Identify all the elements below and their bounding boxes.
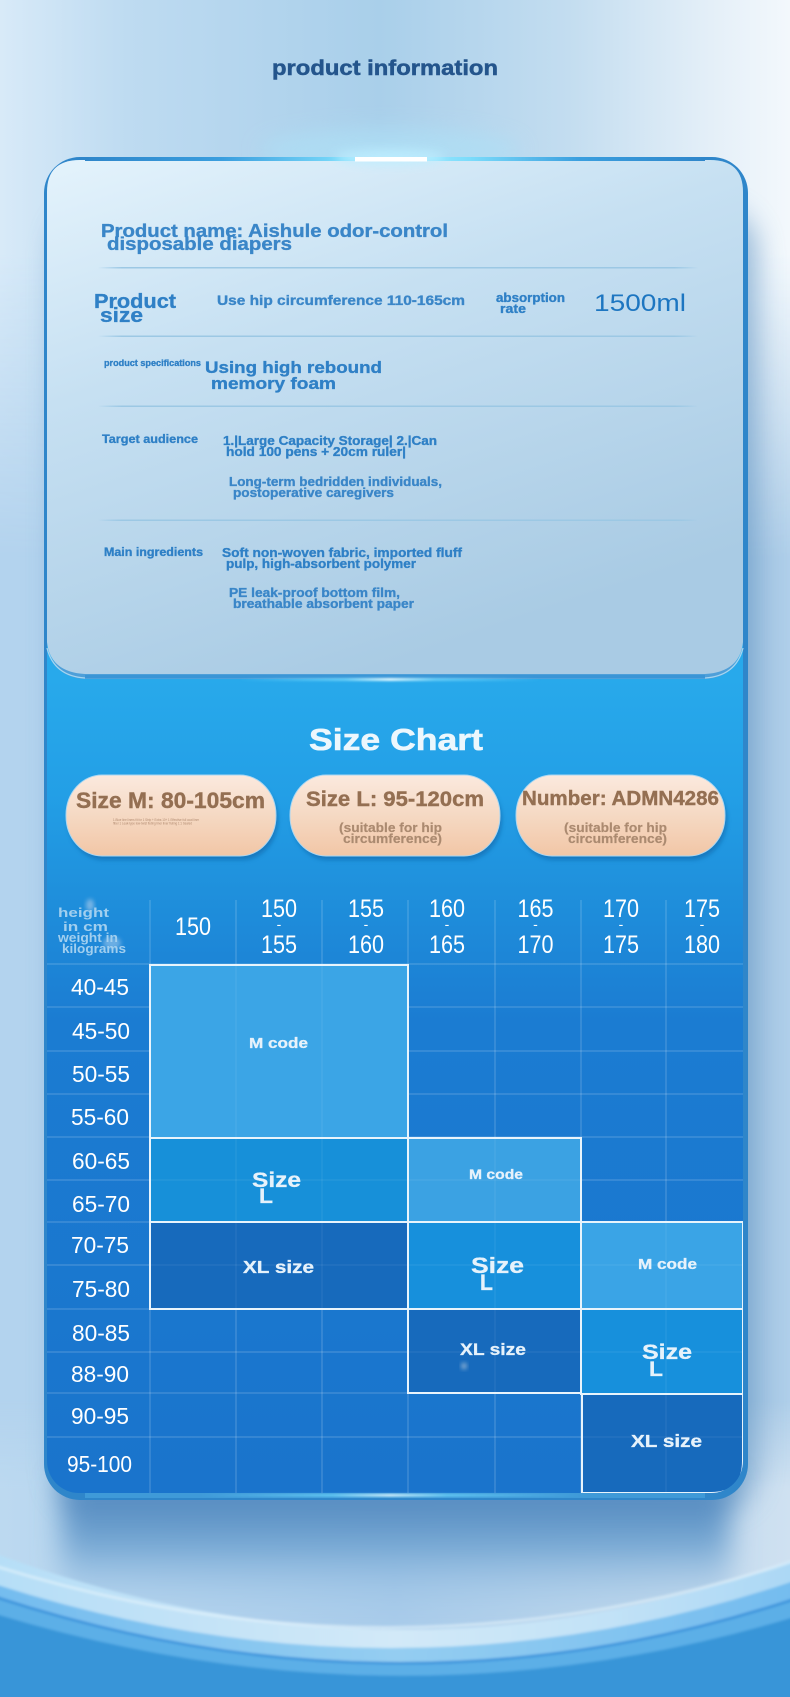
- weight row labels: 80-85: [72, 1320, 130, 1346]
- bottom curved wave: [0, 1544, 790, 1697]
- size labels in table: Size: [642, 1341, 692, 1364]
- table header label: in cm: [63, 919, 108, 934]
- weight row labels: 88-90: [71, 1361, 129, 1387]
- height header values: -: [277, 916, 282, 932]
- pill: size M: fiber 1 Leak-type low-twist fluting liner liner fluting 1:1 Sealed: [113, 822, 192, 826]
- target audience row: postoperative caregivers: [233, 485, 394, 500]
- product specifications row: product specifications: [104, 358, 201, 369]
- weight row labels: 70-75: [71, 1232, 129, 1258]
- product card shell: [44, 157, 748, 1500]
- product specifications row: Using high rebound: [205, 358, 382, 377]
- weight row labels: 50-55: [72, 1061, 130, 1087]
- size labels in table: M code: [469, 1167, 524, 1182]
- pill: size L: [290, 775, 502, 860]
- pill: size L: (suitable for hip: [339, 820, 442, 835]
- pill: number: circumference): [568, 831, 667, 846]
- table header label: weight in: [57, 930, 118, 945]
- height header values: [175, 895, 720, 959]
- weight row labels: 45-50: [72, 1018, 130, 1044]
- height header values: -: [619, 916, 624, 932]
- target audience row: [102, 432, 442, 500]
- size chart heading: Size Chart: [309, 722, 483, 757]
- pill: number: (suitable for hip: [564, 820, 667, 835]
- frosted information panel: [47, 160, 743, 679]
- size labels in table: L: [480, 1270, 493, 1295]
- target audience row: Target audience: [102, 432, 198, 446]
- pill: size M: 1.Blue line liners fit for 1 Strip + Extra 10+ 1 Effective full coat liner: [113, 818, 200, 822]
- height header values: -: [700, 916, 705, 932]
- height header values: -: [533, 916, 538, 932]
- size labels in table: XL size: [631, 1431, 702, 1451]
- height header values: 160: [348, 931, 384, 959]
- table header label: kilograms: [62, 941, 126, 956]
- size labels in table: M code: [638, 1257, 697, 1273]
- block outlines: [150, 965, 743, 1493]
- pill: size L: circumference): [343, 831, 442, 846]
- weight row labels: 60-65: [72, 1148, 130, 1174]
- height header values: 150: [175, 913, 211, 941]
- product name: [101, 220, 448, 254]
- pill: number: [516, 775, 727, 860]
- size labels in table: M code: [249, 1036, 308, 1052]
- table header label: height: [58, 905, 110, 920]
- height header values: 175: [603, 931, 639, 959]
- product size row: Use hip circumference 110-165cm: [217, 292, 465, 308]
- bottom edge glow: [85, 1493, 705, 1498]
- product size row: 1500ml: [594, 290, 686, 317]
- product specifications row: memory foam: [211, 374, 336, 393]
- height header values: 165: [518, 895, 554, 923]
- product size row: rate: [500, 302, 526, 316]
- height header values: 160: [429, 895, 465, 923]
- weight row labels: [67, 974, 132, 1477]
- main ingredients row: pulp, high-absorbent polymer: [226, 556, 416, 571]
- pill: number: Number: ADMN4286: [522, 788, 719, 810]
- weight row labels: 75-80: [72, 1276, 130, 1302]
- size labels in table: L: [259, 1185, 273, 1208]
- height header values: 180: [684, 931, 720, 959]
- size table: [47, 900, 743, 1493]
- height header values: -: [445, 916, 450, 932]
- product size row: size: [100, 304, 143, 327]
- weight row labels: 90-95: [71, 1403, 129, 1429]
- main ingredients row: breathable absorbent paper: [233, 596, 414, 611]
- main ingredients row: Main ingredients: [104, 545, 203, 559]
- size labels in table: Size: [471, 1253, 524, 1278]
- table header label: [57, 899, 126, 956]
- pill: size L: Size L: 95-120cm: [306, 788, 484, 811]
- product size row: [94, 290, 686, 327]
- height header values: 155: [261, 931, 297, 959]
- height header values: 150: [261, 895, 297, 923]
- top and panel glows: [85, 149, 705, 681]
- divider rules: [98, 267, 698, 521]
- grid lines: [47, 900, 743, 1493]
- height header values: 170: [518, 931, 554, 959]
- weight row labels: 40-45: [71, 974, 129, 1000]
- target audience row: Long-term bedridden individuals,: [229, 474, 442, 489]
- product specifications row: [104, 358, 382, 393]
- size labels in table: [243, 1036, 702, 1451]
- card drop shadow: [56, 210, 756, 1615]
- height header values: -: [364, 916, 369, 932]
- size labels in table: L: [649, 1358, 663, 1381]
- product name: Product name: Aishule odor-control: [101, 220, 448, 241]
- size labels in table: XL size: [460, 1340, 526, 1359]
- weight row labels: 65-70: [72, 1191, 130, 1217]
- height header values: 175: [684, 895, 720, 923]
- weight row labels: 95-100: [67, 1451, 132, 1477]
- product size row: absorption: [496, 291, 565, 305]
- target audience row: 1.|Large Capacity Storage| 2.|Can: [223, 433, 437, 448]
- main ingredients row: [104, 545, 463, 611]
- pill: size M: Size M: 80-105cm: [76, 788, 265, 813]
- height header values: 170: [603, 895, 639, 923]
- size labels in table: Size: [252, 1169, 301, 1192]
- height header values: 155: [348, 895, 384, 923]
- faint grid over blocks: [150, 965, 743, 1493]
- height header values: 165: [429, 931, 465, 959]
- main ingredients row: Soft non-woven fabric, imported fluff: [222, 545, 463, 560]
- target audience row: hold 100 pens + 20cm ruler|: [226, 444, 406, 459]
- pill: size M: [66, 775, 278, 860]
- highlighted size blocks: [150, 965, 743, 1493]
- main ingredients row: PE leak-proof bottom film,: [229, 585, 400, 600]
- product size row: Product: [94, 290, 176, 313]
- weight row labels: 55-60: [71, 1104, 129, 1130]
- title: product information: [272, 57, 498, 80]
- size labels in table: XL size: [243, 1257, 314, 1277]
- product name: disposable diapers: [107, 233, 292, 254]
